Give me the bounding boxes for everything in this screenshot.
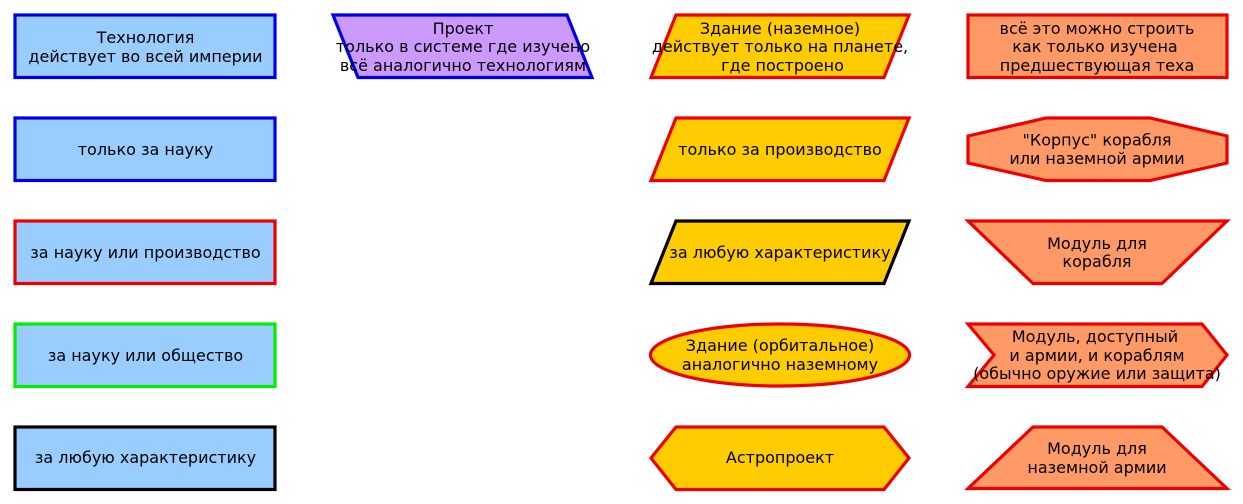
ship module	[968, 221, 1227, 284]
building: orbital: Здание (орбитальное)	[686, 336, 874, 355]
technology: science or production	[15, 221, 275, 284]
note: can be built: всё это можно строить	[1000, 19, 1194, 38]
building: production only: только за производство	[678, 140, 882, 159]
hull: или наземной армии	[1009, 149, 1185, 168]
note: can be built: предшествующая теха	[1000, 56, 1194, 75]
building: any characteristic: за любую характеристику	[669, 243, 891, 262]
technology: any characteristic: за любую характеристику	[35, 448, 256, 467]
building: ground	[651, 15, 909, 78]
technology: whole empire	[15, 15, 275, 78]
ground army module: Модуль для	[1047, 439, 1147, 458]
ground army module	[968, 427, 1227, 488]
ship module: корабля	[1062, 252, 1132, 271]
project: только в системе где изучено	[336, 37, 590, 56]
note: can be built	[968, 15, 1227, 78]
technology: whole empire: Технология	[96, 28, 194, 47]
project	[333, 15, 592, 78]
building: any characteristic	[651, 221, 909, 284]
project: Проект	[433, 19, 493, 38]
building: orbital	[650, 324, 910, 386]
building: ground: где построено	[721, 56, 844, 75]
ground army module: наземной армии	[1027, 458, 1167, 477]
project: всё аналогично технологиям	[340, 56, 586, 75]
universal module: и армии, и кораблям	[1009, 346, 1185, 365]
universal module: Модуль, доступный	[1012, 327, 1178, 346]
astroproject	[651, 427, 909, 490]
universal module: (обычно оружие или защита)	[973, 364, 1221, 383]
building: ground: Здание (наземное)	[700, 19, 860, 38]
ship module: Модуль для	[1047, 234, 1147, 253]
hull: "Корпус" корабля	[1023, 130, 1171, 150]
building: production only	[651, 118, 909, 180]
hull	[968, 118, 1227, 180]
astroproject: Астропроект	[726, 448, 834, 467]
building: orbital: аналогично наземному	[682, 355, 878, 374]
technology: science only	[15, 118, 275, 180]
technology: science or production: за науку или производство	[30, 243, 261, 262]
technology: science or society	[15, 324, 275, 386]
note: can be built: как только изучена	[1012, 37, 1178, 56]
building: ground: действует только на планете,	[652, 37, 908, 56]
technology: science or society: за науку или общество	[48, 346, 243, 365]
technology: any characteristic	[15, 427, 275, 490]
technology: science only: только за науку	[78, 140, 213, 159]
technology: whole empire: действует во всей империи	[28, 47, 263, 66]
universal module	[968, 324, 1227, 386]
